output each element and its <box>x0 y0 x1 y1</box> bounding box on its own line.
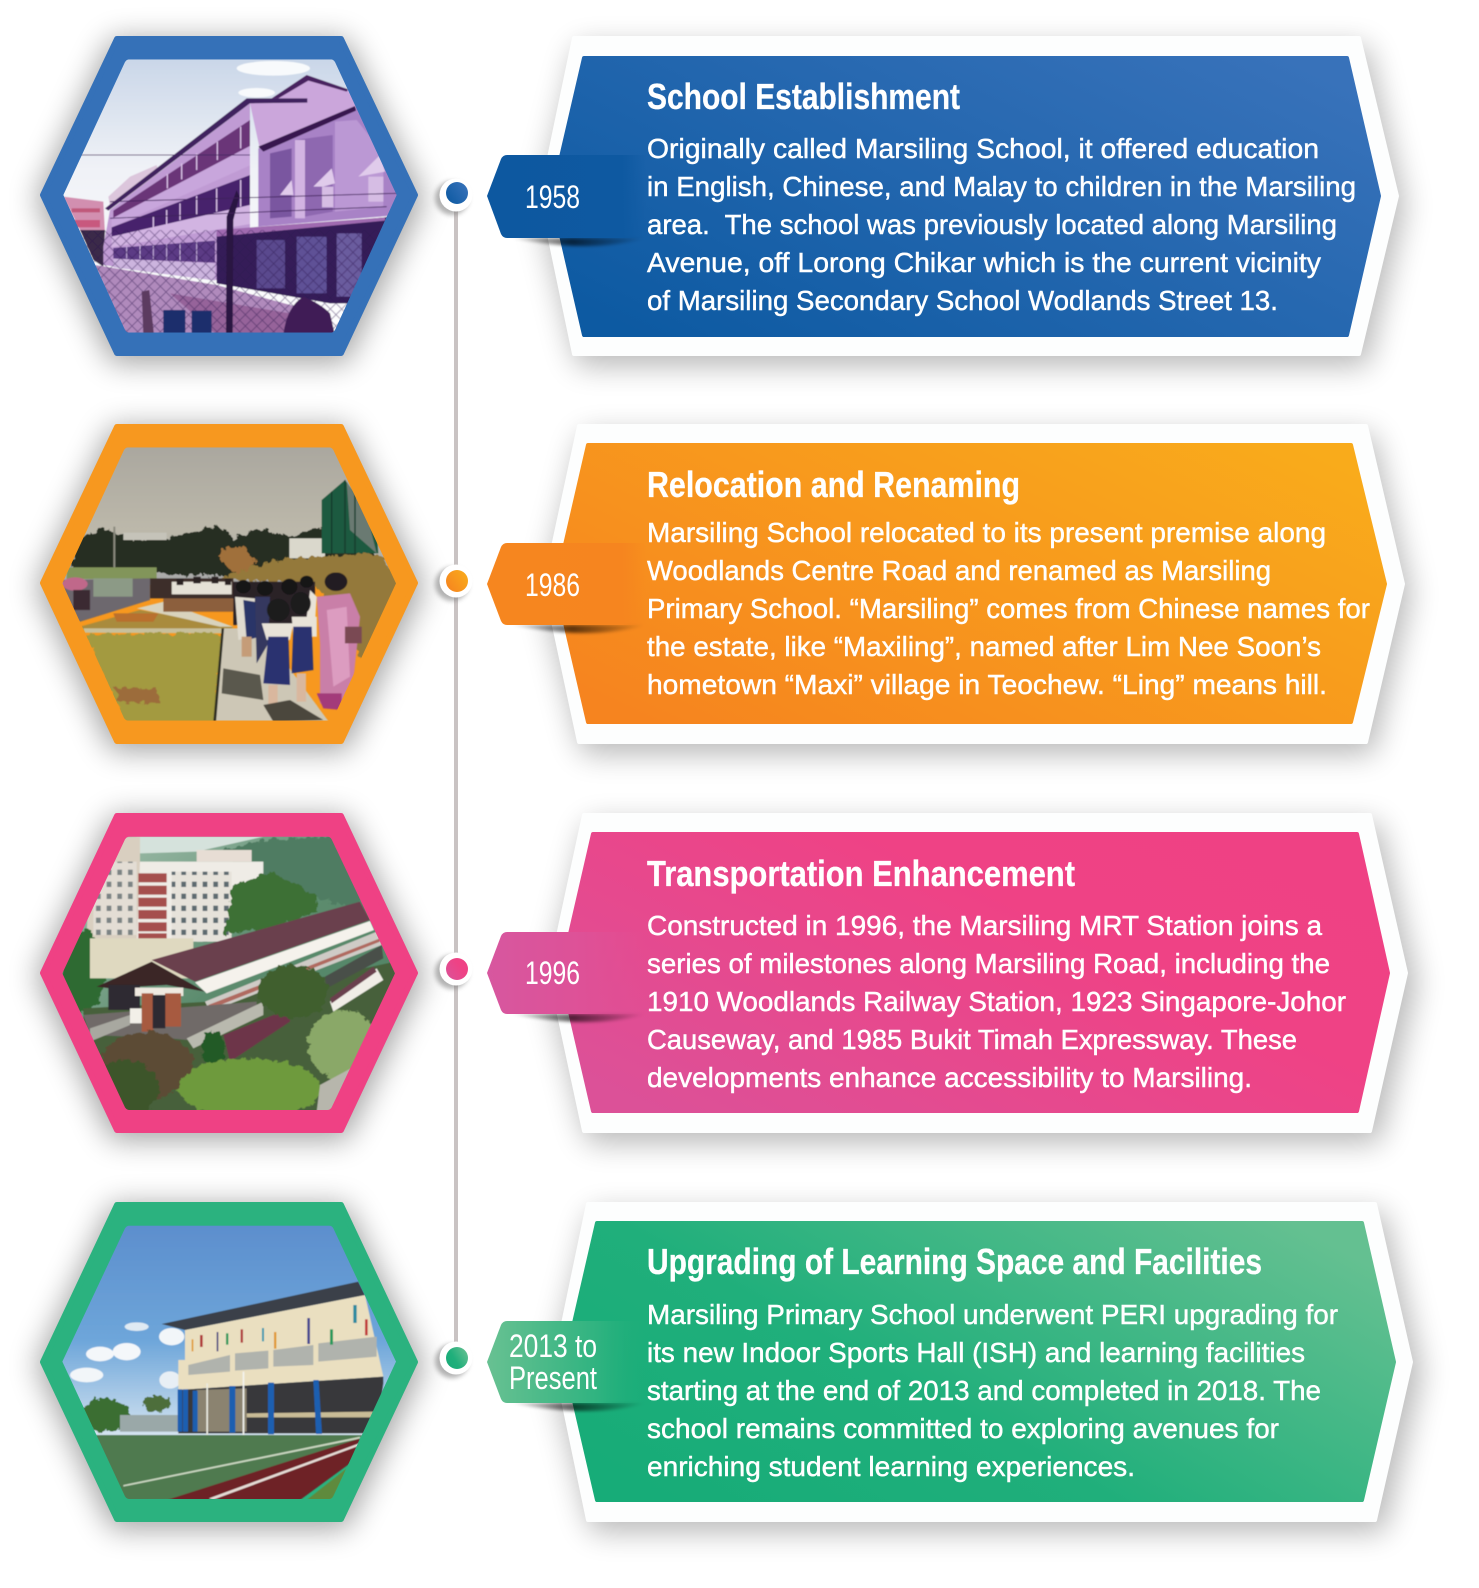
hexagon photo frame: new indoor sports hall <box>36 1205 424 1529</box>
photo: purple-toned school building behind fence <box>60 57 400 337</box>
year tag 1996 <box>487 932 646 1022</box>
body text: hometown “Maxi” village in Teochew. “Ling” means hill. <box>647 669 1327 700</box>
milestone 1996 <box>36 815 1417 1143</box>
body text <box>647 1299 1338 1482</box>
photo: students walking along a path <box>60 445 400 725</box>
text card: Upgrading of Learning Space and Facilities <box>551 1204 1422 1532</box>
body text <box>647 517 1370 700</box>
year tag 1986: 1986 <box>525 567 580 603</box>
year tag 2013 to Present: Present <box>509 1360 597 1396</box>
body text: Causeway, and 1985 Bukit Timah Expressway. These <box>647 1024 1297 1055</box>
photo: school hall and sports field <box>60 1223 400 1500</box>
hexagon photo frame: 1996 MRT station <box>36 816 424 1140</box>
body text: Avenue, off Lorong Chikar which is the current vicinity <box>647 247 1321 278</box>
body text: 1910 Woodlands Railway Station, 1923 Singapore-Johor <box>647 986 1346 1017</box>
hexagon photo frame: 1986 students walking <box>36 427 424 751</box>
body text: Constructed in 1996, the Marsiling MRT Station joins a <box>647 910 1322 941</box>
photo: Marsiling MRT station <box>60 835 397 1118</box>
heading: Transportation Enhancement <box>647 853 1075 894</box>
body text <box>647 133 1356 316</box>
timeline connector line <box>454 205 458 1345</box>
body text: its new Indoor Sports Hall (ISH) and learning facilities <box>647 1337 1305 1368</box>
body text: starting at the end of 2013 and completed in 2018. The <box>647 1375 1321 1406</box>
year tag 1958 <box>487 155 646 246</box>
body text: Woodlands Centre Road and renamed as Marsiling <box>647 555 1271 586</box>
text card: Relocation and Renaming <box>542 426 1411 754</box>
year tag 1958: 1958 <box>525 179 580 215</box>
body text: Originally called Marsiling School, it offered education <box>647 133 1319 164</box>
milestone 1958 <box>36 38 1405 366</box>
milestone 2013 to Present <box>36 1204 1422 1532</box>
body text: enriching student learning experiences. <box>647 1451 1135 1482</box>
timeline dot 1986 <box>435 564 472 601</box>
timeline dot 2013 <box>435 1342 472 1378</box>
heading: Relocation and Renaming <box>647 464 1020 505</box>
year tag 2013 to Present <box>487 1321 646 1411</box>
year tag 2013 to Present: 2013 to <box>509 1328 597 1364</box>
body text: the estate, like “Maxiling”, named after Lim Nee Soon’s <box>647 631 1321 662</box>
year tag 1996: 1996 <box>525 955 580 991</box>
body text: series of milestones along Marsiling Road, including the <box>647 948 1330 979</box>
hexagon photo frame: 1958 school building <box>36 39 424 363</box>
timeline dot 1958 <box>435 178 472 215</box>
body text: in English, Chinese, and Malay to children in the Marsiling <box>647 171 1356 202</box>
body text: area. The school was previously located along Marsiling <box>647 209 1337 240</box>
body text: Marsiling School relocated to its present premise along <box>647 517 1326 548</box>
body text: developments enhance accessibility to Marsiling. <box>647 1062 1252 1093</box>
heading: School Establishment <box>647 76 960 117</box>
heading: Upgrading of Learning Space and Facilities <box>647 1241 1262 1282</box>
body text: Marsiling Primary School underwent PERI upgrading for <box>647 1299 1338 1330</box>
body text: school remains committed to exploring avenues for <box>647 1413 1279 1444</box>
text card: Transportation Enhancement <box>547 815 1417 1143</box>
body text: Primary School. “Marsiling” comes from Chinese names for <box>647 593 1370 624</box>
body text: of Marsiling Secondary School Wodlands Street 13. <box>647 285 1278 316</box>
body text <box>647 910 1346 1093</box>
timeline dot 1996 <box>435 952 472 989</box>
milestone 1986 <box>36 426 1411 754</box>
text card: School Establishment <box>538 38 1405 366</box>
year tag 1986 <box>487 543 646 633</box>
